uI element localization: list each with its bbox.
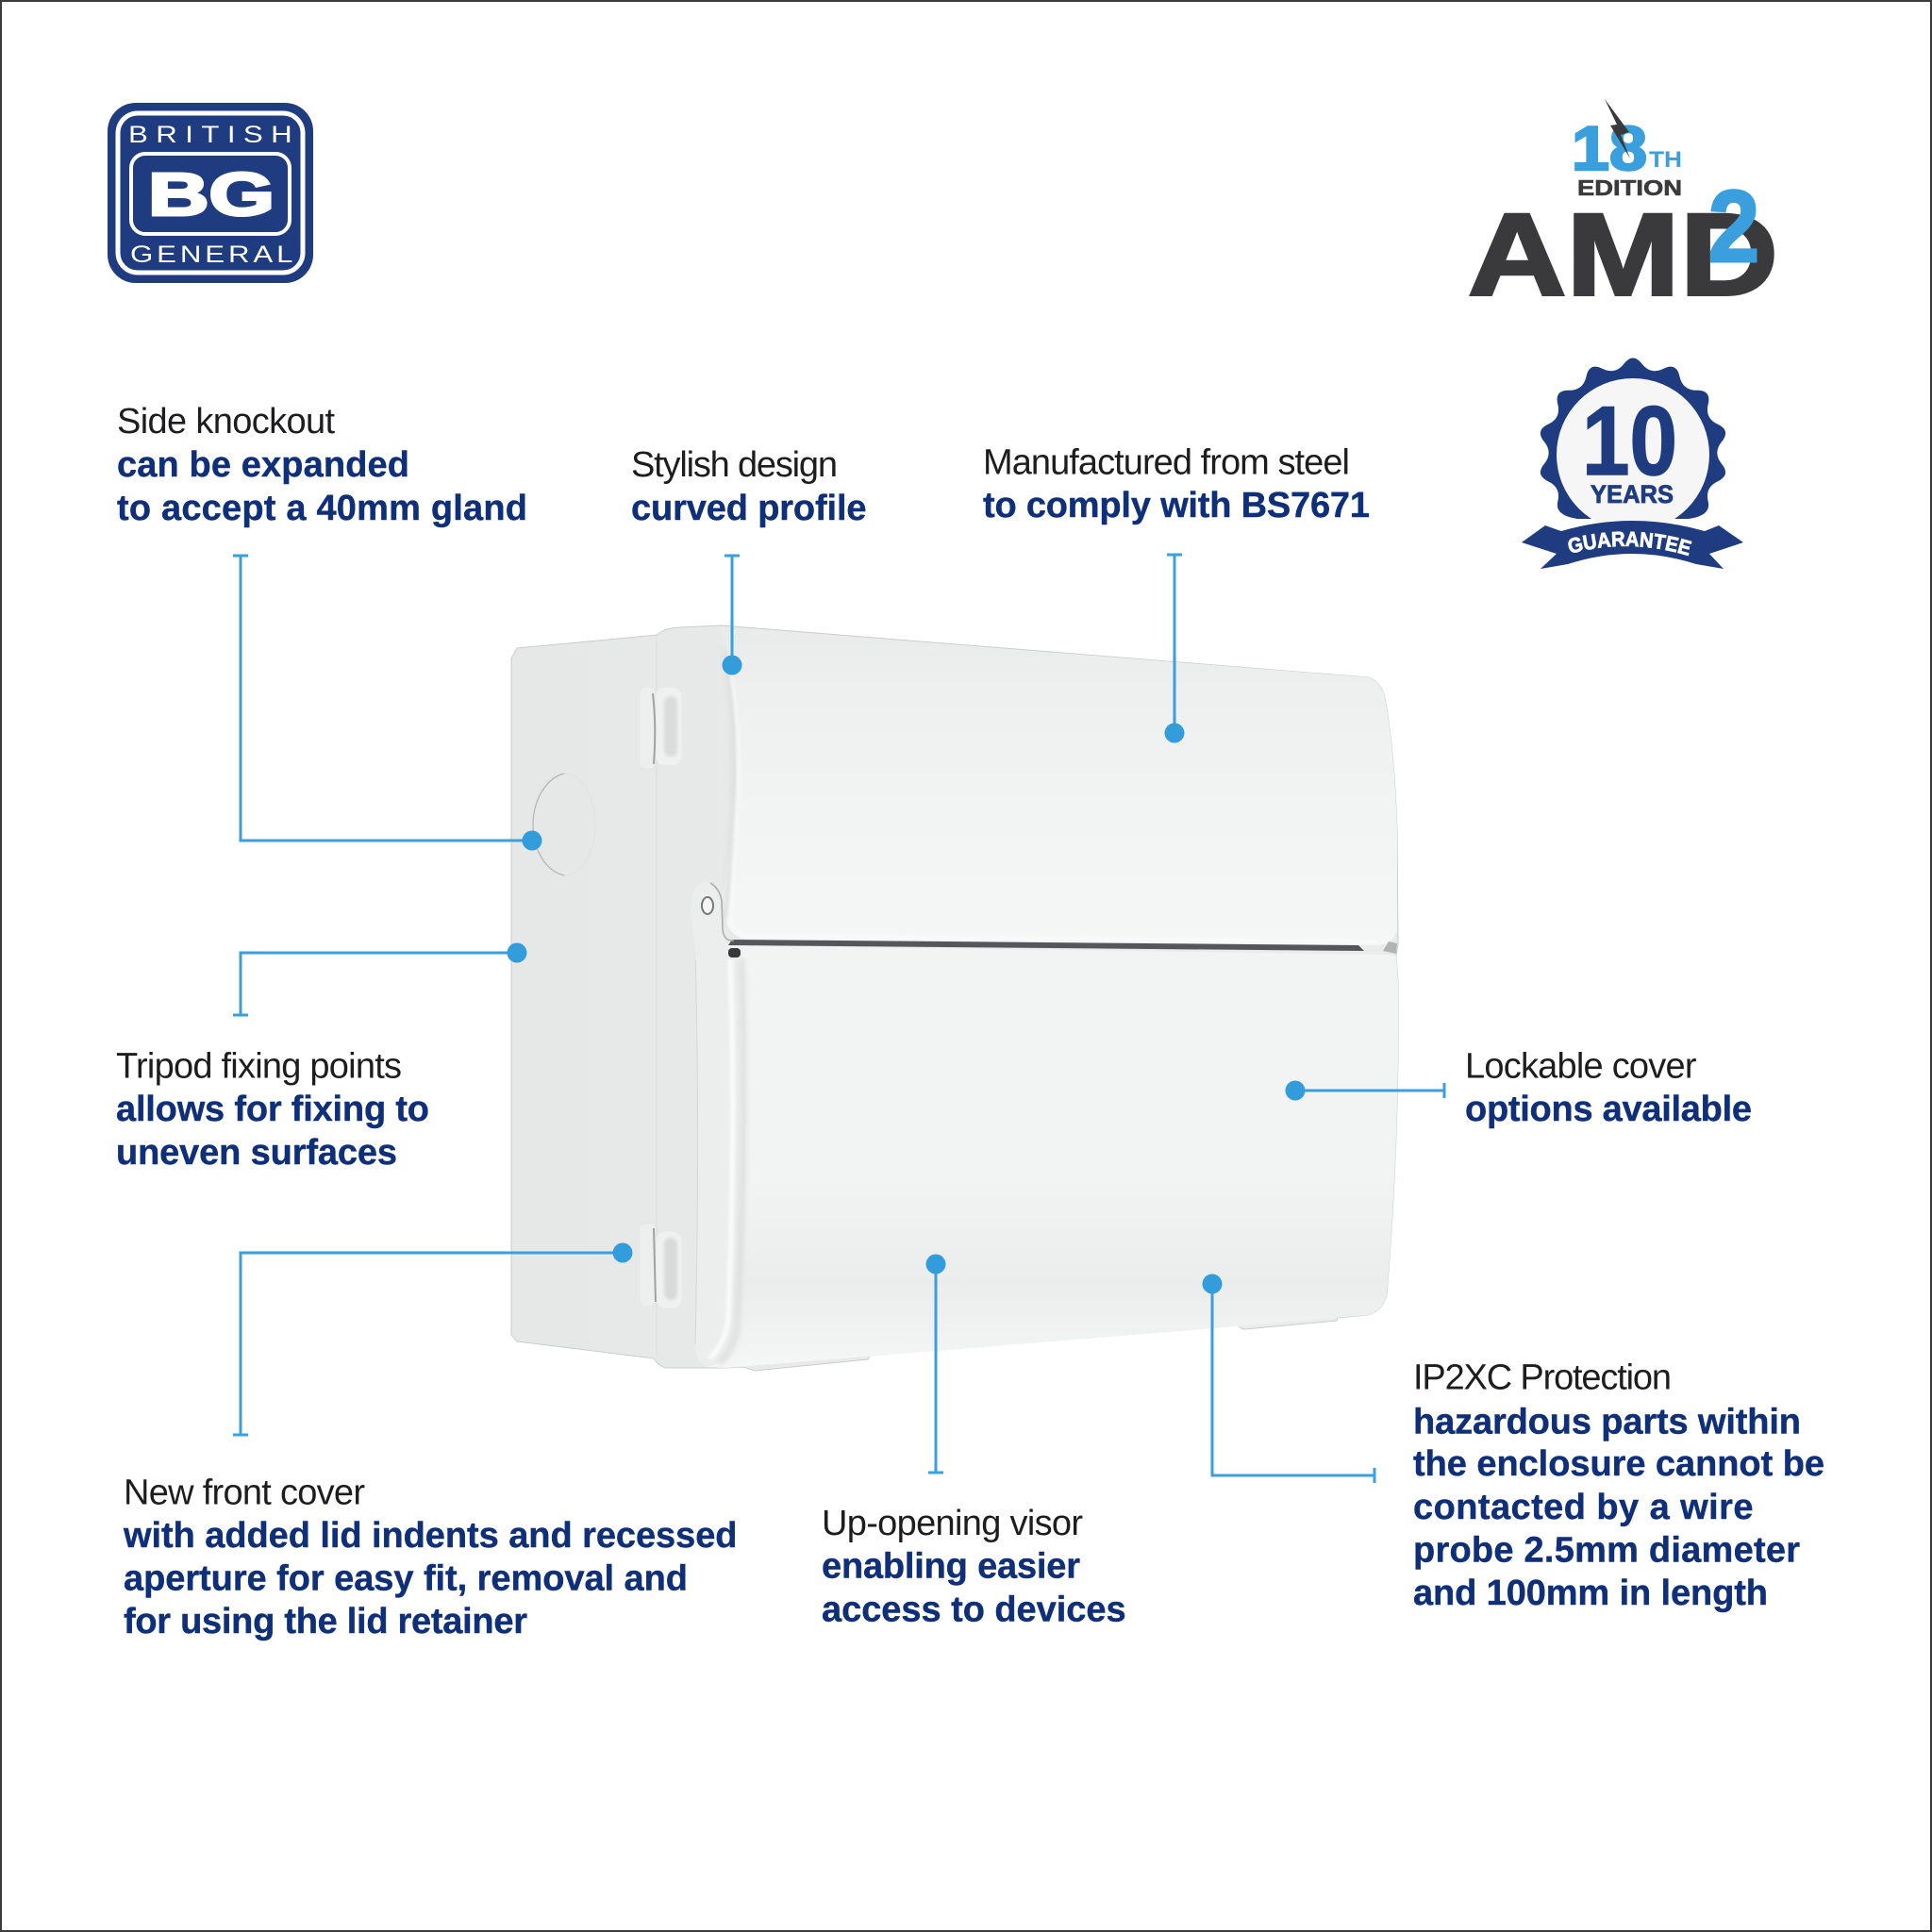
product: consumer unit enclosure <box>511 625 1398 1371</box>
text: new front cover: aperture for easy fit, removal and <box>124 1558 688 1598</box>
upper cover <box>719 626 1397 945</box>
badge: 10 years guarantee: 10 <box>1582 387 1677 496</box>
enclosure silhouette and side panel <box>511 625 1398 1371</box>
text: up-opening visor <box>822 1504 1126 1630</box>
text: lockable cover: options available <box>1465 1090 1752 1129</box>
text: new front cover <box>123 1474 738 1641</box>
text: new front cover: for using the lid retainer <box>124 1602 527 1641</box>
text: new front cover: with added lid indents and recessed <box>123 1516 738 1556</box>
logo: British General: GENERAL <box>130 241 292 267</box>
upper cover ridge shadow <box>724 651 735 920</box>
badge: 10 years guarantee: GUARANTEE <box>1568 531 1692 557</box>
leader: manufactured from steel <box>1164 555 1185 743</box>
text: side knockout: can be expanded <box>117 445 409 485</box>
text: IP2XC protection: the enclosure cannot be <box>1413 1444 1824 1484</box>
text: stylish design: Stylish design <box>631 445 838 485</box>
text: IP2XC protection: IP2XC Protection <box>1413 1358 1672 1398</box>
text: manufactured from steel: to comply with BS7671 <box>983 486 1370 525</box>
leader: IP2XC protection <box>1202 1274 1374 1483</box>
logo: 18th Edition AMD2: 2 <box>1708 169 1759 283</box>
logo: 18th Edition AMD2: TH <box>1649 147 1682 173</box>
text: stylish design: curved profile <box>631 489 866 528</box>
logo: 18th Edition AMD2 <box>1468 99 1778 321</box>
text: side knockout <box>117 402 527 528</box>
lower cover <box>695 945 1398 1368</box>
text: stylish design <box>631 445 866 528</box>
leader: side knockout <box>233 556 541 851</box>
logo: 18th Edition AMD2: AMD <box>1468 191 1778 321</box>
text: up-opening visor: enabling easier <box>822 1547 1080 1587</box>
leader: lockable cover <box>1285 1081 1444 1100</box>
lower cover left band <box>695 947 741 1367</box>
badge: 10 years guarantee: YEARS <box>1591 480 1674 508</box>
text: side knockout: Side knockout <box>117 402 335 441</box>
text: tripod fixing points: Tripod fixing points <box>116 1047 402 1087</box>
hinge screw <box>702 897 713 914</box>
text: tripod fixing points: allows for fixing to <box>116 1090 429 1129</box>
text: lockable cover: Lockable cover <box>1465 1047 1697 1087</box>
badge: 10 years guarantee <box>1522 358 1743 569</box>
text: lockable cover <box>1465 1047 1752 1129</box>
leader: new front cover <box>233 1243 632 1435</box>
text: IP2XC protection: contacted by a wire <box>1413 1488 1753 1527</box>
leader: tripod fixing points <box>233 943 526 1015</box>
logo: British General <box>108 103 313 283</box>
text: manufactured from steel: Manufactured from steel <box>983 443 1350 483</box>
lower fixing slot <box>640 1224 682 1308</box>
logo: 18th Edition AMD2: 18 <box>1572 113 1647 183</box>
leader: stylish design <box>723 556 741 675</box>
text: IP2XC protection: probe 2.5mm diameter <box>1413 1530 1800 1570</box>
logo: British General: BRITISH <box>128 121 292 147</box>
upper cover ridge highlight <box>728 656 1377 941</box>
upper fixing slot <box>640 687 682 769</box>
logo: British General: BG <box>148 160 275 228</box>
text: new front cover: New front cover <box>124 1474 365 1513</box>
hinge plate <box>691 882 741 959</box>
text: tripod fixing points <box>116 1047 429 1173</box>
text: manufactured from steel <box>983 443 1370 525</box>
text: up-opening visor: access to devices <box>822 1591 1126 1630</box>
text: IP2XC protection: and 100mm in length <box>1413 1574 1768 1613</box>
text: IP2XC protection: hazardous parts within <box>1413 1402 1801 1441</box>
logo: 18th Edition AMD2: EDITION <box>1577 175 1682 200</box>
text: IP2XC protection <box>1413 1358 1824 1613</box>
lower cover ridge <box>709 958 733 1358</box>
knockout circle <box>533 774 595 875</box>
gap between covers <box>728 940 1364 951</box>
side flange edge <box>656 636 658 1357</box>
text: up-opening visor: Up-opening visor <box>822 1504 1083 1543</box>
leader: up-opening visor <box>926 1255 945 1473</box>
text: side knockout: to accept a 40mm gland <box>117 489 527 528</box>
text: tripod fixing points: uneven surfaces <box>116 1133 397 1173</box>
